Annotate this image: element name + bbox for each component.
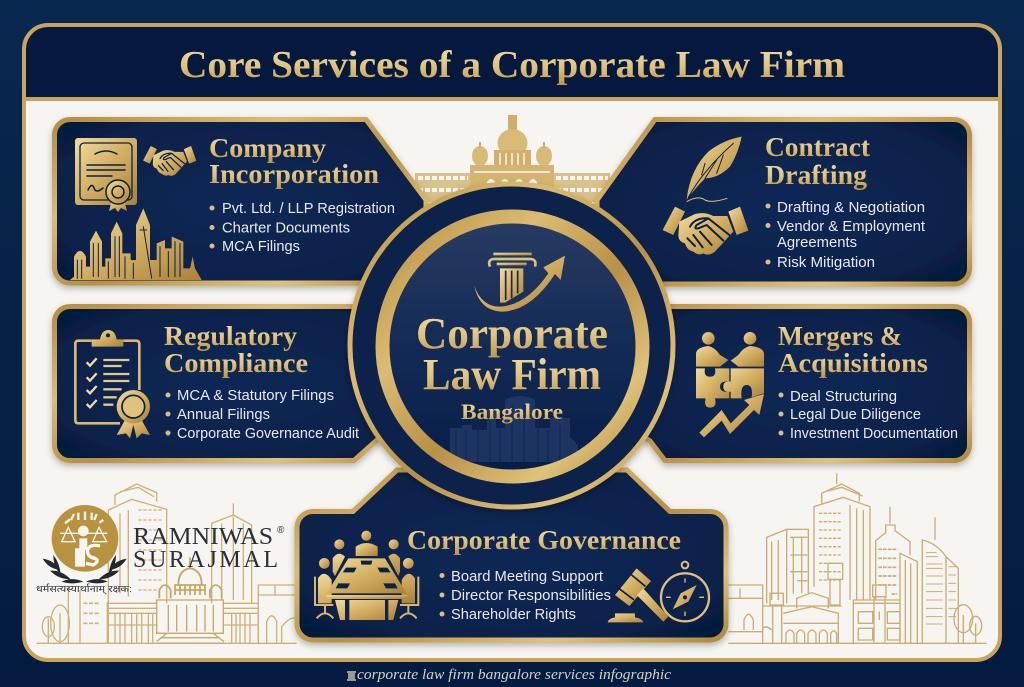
panel: contract drafting: Drafting xyxy=(765,160,868,190)
heading: Mergers & xyxy=(778,321,902,351)
heading: Regulatory xyxy=(164,321,298,351)
bullet list: Shareholder Rights xyxy=(451,607,576,623)
logo wordmark: RAMNIWAS xyxy=(133,524,273,550)
panel: mergers and acquisitions xyxy=(620,306,970,460)
logo: Ramniwas Surajmal xyxy=(36,505,285,595)
logo emblem xyxy=(43,505,127,583)
bullet list: Charter Documents xyxy=(222,220,350,236)
icon: certificate with seal xyxy=(75,138,137,212)
bullet list: Deal Structuring xyxy=(790,389,897,405)
bullet list: Pvt. Ltd. / LLP Registration xyxy=(222,201,395,217)
icon: column and rising arrow xyxy=(474,253,565,312)
bullet list: Vendor & Employment xyxy=(777,219,925,235)
icon: compass xyxy=(661,562,709,621)
bullet list: MCA & Statutory Filings xyxy=(177,388,334,404)
bullet list xyxy=(766,200,925,271)
panel: company incorporation xyxy=(54,120,426,283)
bullet list xyxy=(440,569,611,623)
header band xyxy=(26,27,998,101)
bullet list: Drafting & Negotiation xyxy=(777,200,925,216)
panel: contract drafting xyxy=(597,120,970,284)
icon: boardroom table xyxy=(315,531,418,620)
panel: corporate governance xyxy=(297,470,726,640)
heading: Corporate Governance xyxy=(407,525,681,555)
panel: mergers and acquisitions: Acquisitions xyxy=(778,348,928,378)
icon: partners, puzzle and arrow xyxy=(696,332,764,437)
title: Core Services of a Corporate Law Firm xyxy=(179,44,845,86)
icon: quill and handshake xyxy=(663,137,748,255)
bullet list xyxy=(166,388,359,442)
heading: Company xyxy=(209,133,327,163)
panel: regulatory compliance: Compliance xyxy=(164,348,308,378)
panel: regulatory compliance xyxy=(54,306,420,460)
bullet list: Risk Mitigation xyxy=(777,255,875,271)
heading: Contract xyxy=(765,132,870,162)
bullet list: Corporate Governance Audit xyxy=(177,426,359,442)
centre medallion xyxy=(350,184,673,507)
left line-art skyline xyxy=(37,484,297,643)
bullet list: Legal Due Diligence xyxy=(790,407,921,423)
centre medallion: Law Firm xyxy=(423,350,601,399)
bullet list: Board Meeting Support xyxy=(451,569,603,585)
panel: company incorporation: Incorporation xyxy=(209,159,379,189)
bullet list: Investment Documentation xyxy=(790,426,958,442)
footer caption: corporate law firm bangalore services infographic xyxy=(357,667,671,683)
icon: small pillar xyxy=(347,671,356,681)
capitol building behind the centre xyxy=(415,115,610,202)
faint city inside medallion xyxy=(450,396,578,462)
bullet list: Annual Filings xyxy=(177,407,270,423)
icon: city skyline xyxy=(70,208,202,280)
bullet list xyxy=(210,201,395,255)
icon: clipboard with seal xyxy=(75,330,150,438)
bullet list: Agreements xyxy=(777,235,857,251)
icon: handshake xyxy=(143,146,196,176)
icon: gavel xyxy=(608,568,668,622)
bullet list xyxy=(778,389,958,442)
bullet list: Director Responsibilities xyxy=(451,588,611,604)
right line-art skyline xyxy=(728,473,987,643)
logo: Ramniwas Surajmal: SURAJMAL xyxy=(133,547,278,573)
logo motto: धर्मसत्यस्यार्थानाम् रक्षक: xyxy=(36,583,132,595)
centre title: Corporate xyxy=(416,309,608,358)
bullet list: MCA Filings xyxy=(222,239,300,255)
logo: Ramniwas Surajmal: ® xyxy=(277,525,285,536)
centre subtitle: Bangalore xyxy=(461,399,563,424)
